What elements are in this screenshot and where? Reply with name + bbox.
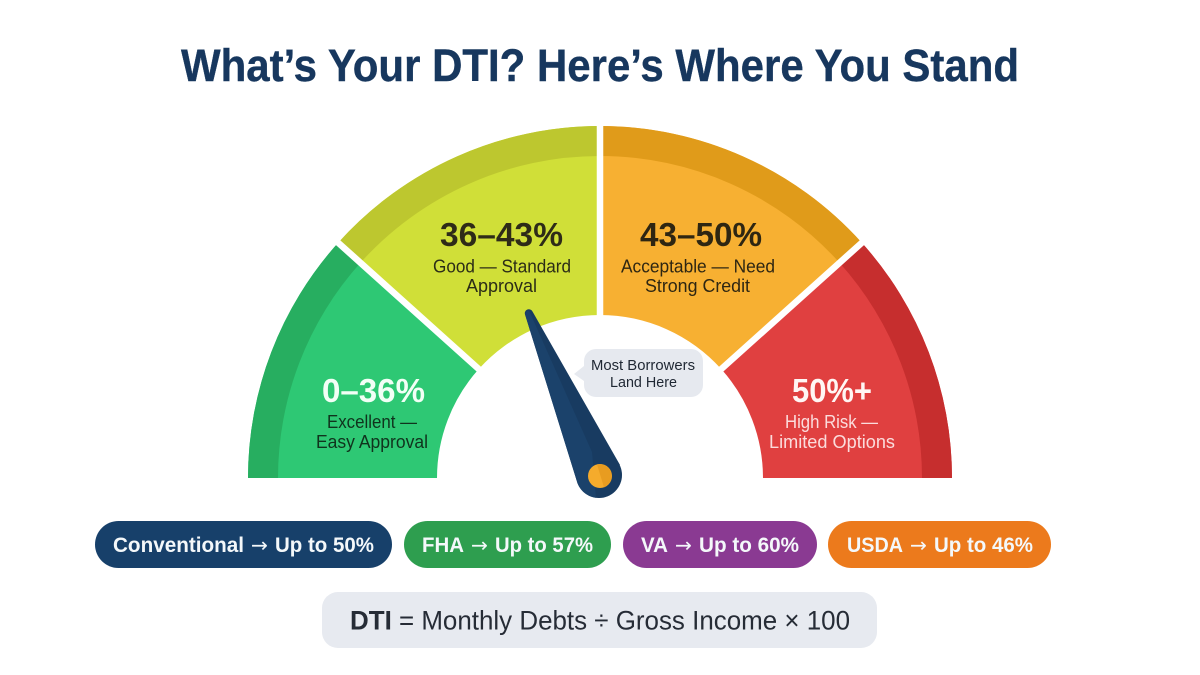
pill: conventional: Conventional <box>113 534 244 557</box>
panel: orange segment 43-50% <box>600 126 862 369</box>
panel: orange segment 43-50%: Strong Credit <box>645 276 750 296</box>
panel: red segment 50%+: Limited Options <box>769 432 895 452</box>
panel: green segment 0-36%: Excellent — <box>327 412 417 432</box>
panel: red segment 50%+: 50%+ <box>792 372 872 409</box>
pill: FHA: → <box>471 533 488 557</box>
pill: USDA: Up to 46% <box>934 534 1033 557</box>
callout: most borrowers land here: Most Borrowers <box>591 358 695 374</box>
pill: FHA: FHA <box>422 534 464 557</box>
pill: VA: VA <box>641 534 668 557</box>
title: What’s Your DTI? Here’s Where You Stand <box>181 40 1019 91</box>
pill: conventional: → <box>251 533 268 557</box>
panel: green segment 0-36% <box>248 242 479 478</box>
panel: yellow segment 36-43% <box>338 126 600 369</box>
formula box: DTI = Monthly Debts ÷ Gross Income × 100 <box>350 606 850 636</box>
pill: conventional <box>95 521 392 568</box>
gauge chart <box>248 120 952 478</box>
panel: yellow segment 36-43%: Good — Standard <box>433 256 571 276</box>
pill: USDA <box>828 521 1051 568</box>
pill: FHA <box>404 521 611 568</box>
icon: gauge needle <box>525 309 622 498</box>
callout: most borrowers land here: Land Here <box>610 375 677 391</box>
panel: yellow segment 36-43%: 36–43% <box>440 216 563 253</box>
panel: red segment 50%+ <box>721 242 952 478</box>
panel: red segment 50%+: High Risk — <box>785 412 878 432</box>
pill: VA: Up to 60% <box>699 534 799 557</box>
panel: orange segment 43-50%: 43–50% <box>640 216 762 253</box>
pill: FHA: Up to 57% <box>495 534 593 557</box>
formula box <box>322 592 877 648</box>
pill: USDA: → <box>910 533 927 557</box>
callout: most borrowers land here <box>574 349 703 397</box>
panel: orange segment 43-50%: Acceptable — Need <box>621 256 775 276</box>
pill: USDA: USDA <box>847 534 903 557</box>
pills: loan limits <box>95 521 1051 568</box>
pill: VA: → <box>675 533 692 557</box>
pill: conventional: Up to 50% <box>275 534 374 557</box>
panel: green segment 0-36%: Easy Approval <box>316 432 428 452</box>
panel: yellow segment 36-43%: Approval <box>466 276 537 296</box>
pill: VA <box>623 521 817 568</box>
panel: green segment 0-36%: 0–36% <box>322 372 425 409</box>
